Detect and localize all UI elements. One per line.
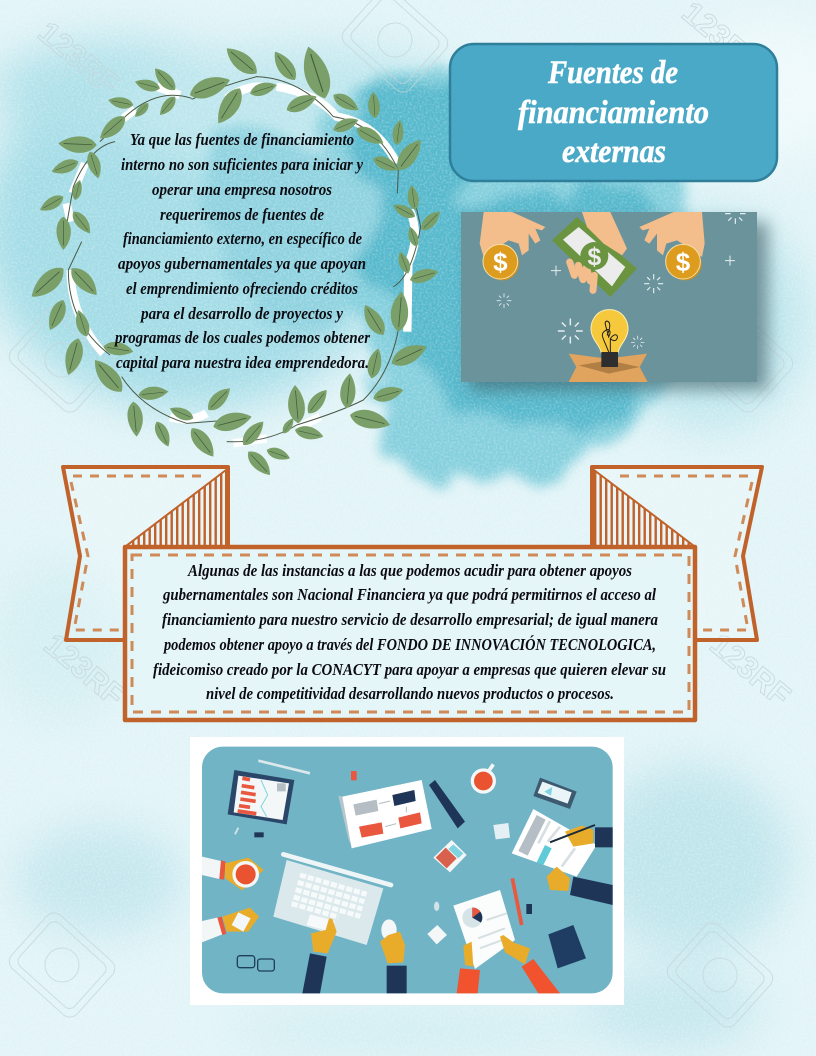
wreath text: apoyos gubernamentales ya que apoyan	[118, 254, 366, 273]
ribbon text	[153, 561, 666, 703]
light bulb in box	[569, 310, 648, 382]
sticky note	[493, 823, 510, 839]
calculator	[433, 840, 467, 872]
ribbon text: nivel de competitividad desarrollando nuevos productos o procesos.	[206, 684, 614, 703]
left tail	[63, 467, 228, 640]
title text: financiamiento	[518, 95, 709, 131]
ribbon text: podemos obtener apoyo a través del FONDO DE INNOVACIÓN TECNOLOGICA,	[162, 635, 656, 654]
coffee cup top	[471, 764, 496, 794]
leaf wreath with text	[26, 42, 444, 479]
phone	[533, 778, 577, 809]
title text: Fuentes de	[547, 55, 678, 91]
title panel	[450, 44, 777, 181]
pencil and small items	[235, 761, 532, 914]
hand with notepad	[202, 908, 259, 942]
watermarks: 123RF	[704, 627, 797, 713]
glasses	[237, 956, 274, 971]
left hand with coin: $	[493, 247, 508, 277]
panel stitching	[132, 555, 689, 712]
wreath text: requeriremos de fuentes de	[160, 205, 324, 224]
illustration: money and idea	[461, 203, 768, 390]
hand with coffee	[202, 857, 264, 890]
wreath text: interno no son suficientes para iniciar y	[121, 155, 364, 174]
wreath text: para el desarrollo de proyectos y	[139, 304, 344, 323]
banknote in hand: $	[587, 244, 601, 271]
watermarks: 123RF	[32, 15, 125, 101]
ribbon text: financiamiento para nuestro servicio de desarrollo empresarial; de igual manera	[162, 610, 658, 629]
charts document with hands	[453, 890, 560, 993]
title text: externas	[562, 134, 666, 170]
ribbon main panel	[125, 547, 695, 720]
wreath text: programas de los cuales podemos obtener	[113, 328, 371, 347]
laptop	[273, 854, 391, 945]
hand on mouse	[380, 919, 407, 993]
wreath text: operar una empresa nosotros	[152, 180, 332, 199]
wreath text	[113, 130, 371, 372]
red pencil	[512, 878, 522, 925]
ribbon text: Algunas de las instancias a las que podemos acudir para obtener apoyos	[187, 561, 632, 580]
left hand with coin	[480, 212, 545, 280]
report with hands at right	[512, 809, 613, 905]
sparkles	[497, 203, 746, 349]
right hand with coin: $	[676, 247, 691, 277]
illustration: team at work desk	[190, 737, 624, 1005]
banknote in hand	[552, 212, 637, 297]
ribbon text: fideicomiso creado por la CONACYT para apoyar a empresas que quieren elevar su	[153, 660, 666, 679]
ribbon banner	[63, 467, 762, 720]
wreath	[26, 42, 444, 479]
wreath text: capital para nuestra idea emprendedora.	[116, 353, 369, 372]
wreath text: el emprendimiento ofreciendo créditos	[126, 279, 358, 298]
tablet	[228, 770, 294, 824]
right tail	[592, 467, 762, 640]
title text	[518, 55, 709, 170]
ribbon text: gubernamentales son Nacional Financiera ya que podrá permitirnos el acceso al	[162, 585, 656, 604]
watermarks: 123RF	[38, 627, 131, 713]
right hand with coin	[639, 212, 705, 280]
mini chart note	[427, 925, 447, 944]
hand on laptop	[302, 918, 337, 993]
notebook	[548, 925, 586, 968]
ruler	[429, 780, 465, 828]
wreath text: financiamiento externo, en específico de	[123, 229, 362, 248]
flowchart document	[338, 780, 432, 848]
wreath text: Ya que las fuentes de financiamiento	[130, 130, 354, 149]
